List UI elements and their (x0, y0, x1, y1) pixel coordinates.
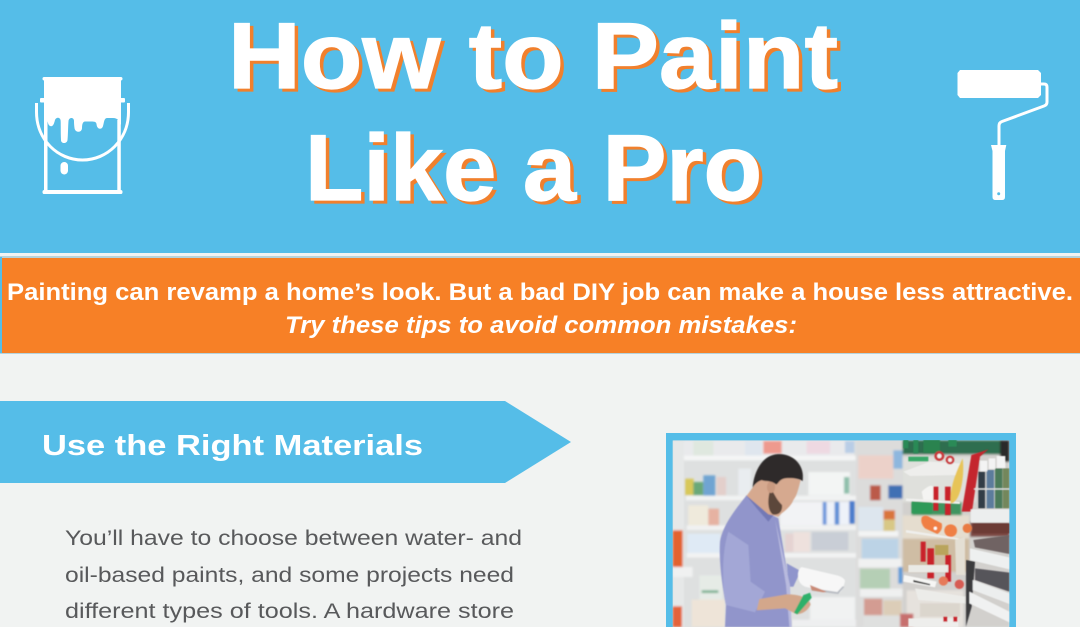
title: Like a Pro (305, 115, 762, 220)
section arrow heading (0, 401, 571, 483)
left shelving (673, 440, 684, 627)
section arrow heading: Use the Right Materials (42, 430, 423, 462)
hair (753, 454, 803, 488)
far sleeve (787, 563, 801, 587)
icon: paint roller (958, 70, 1047, 200)
body text: different types of tools. A hardware store (65, 599, 514, 623)
title: How to Paint (232, 6, 842, 111)
ear (767, 481, 775, 493)
photo: man choosing a paint roller in a hardware store (666, 433, 1016, 627)
intro banner (0, 256, 1080, 354)
shirt (720, 495, 792, 627)
right tool wall (903, 440, 1009, 627)
intro text: Painting can revamp a home’s look. But a bad DIY job can make a house less attractive. (7, 279, 1073, 306)
header banner (0, 0, 1080, 253)
centre racks (856, 440, 903, 627)
forearm and hand (757, 594, 811, 614)
neck and face (747, 476, 801, 517)
paint roller in hand (798, 567, 845, 594)
intro text: Try these tips to avoid common mistakes: (285, 312, 797, 339)
near sleeve (723, 532, 765, 612)
body text: You’ll have to choose between water- and (65, 526, 522, 550)
body text (65, 526, 522, 623)
intro text (7, 279, 1073, 339)
icon: paint can (36, 77, 128, 194)
body text: oil-based paints, and some projects need (65, 563, 514, 587)
title: Like a Pro (308, 118, 766, 223)
man (720, 454, 845, 627)
title: How to Paint (228, 3, 838, 108)
title (228, 3, 842, 223)
tool rack (903, 440, 1009, 627)
